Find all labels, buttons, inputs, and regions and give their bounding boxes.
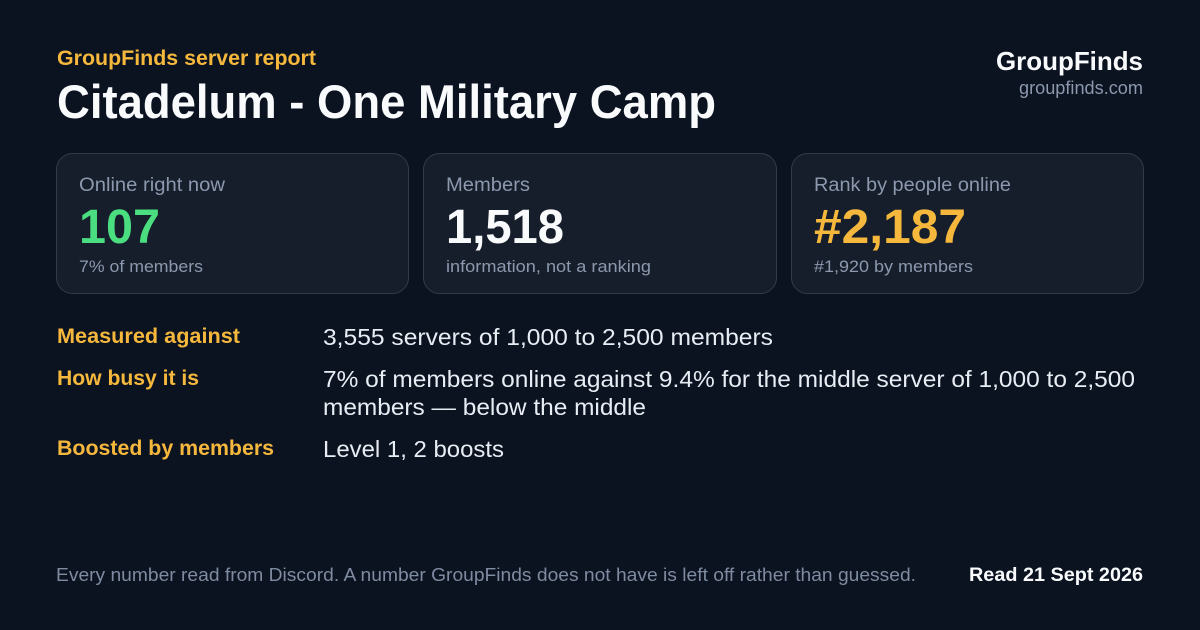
label: Rank by people online — [814, 175, 1011, 196]
row: boosted by members — [57, 436, 504, 462]
panel: online right now — [56, 154, 408, 294]
label: Online right now — [79, 175, 225, 196]
value: 107 — [79, 201, 160, 254]
panel: rank by people online — [792, 154, 1144, 294]
footer note: Every number read from Discord. A number GroupFinds does not have is left off rather than guessed. — [56, 565, 916, 585]
read date: Read 21 Sept 2026 — [969, 565, 1143, 586]
note: 7% of members — [79, 257, 203, 276]
row value: members — below the middle — [323, 394, 646, 420]
row value: 3,555 servers of 1,000 to 2,500 members — [323, 324, 773, 350]
row label: Measured against — [57, 325, 240, 348]
note: information, not a ranking — [446, 257, 651, 276]
panel: members — [424, 154, 776, 294]
value: #2,187 — [814, 201, 966, 254]
row value — [323, 366, 1135, 420]
brand block — [996, 46, 1143, 98]
row: measured against — [57, 324, 773, 350]
row label: Boosted by members — [57, 437, 274, 460]
note: #1,920 by members — [814, 257, 973, 276]
title: Citadelum - One Military Camp — [57, 75, 716, 128]
brand name: GroupFinds — [996, 46, 1143, 76]
eyebrow: GroupFinds server report — [57, 47, 316, 70]
label: Members — [446, 175, 530, 196]
row: how busy it is — [57, 366, 1135, 420]
row label: How busy it is — [57, 367, 199, 390]
row value: Level 1, 2 boosts — [323, 436, 504, 462]
value: 1,518 — [446, 201, 564, 254]
row value: 7% of members online against 9.4% for the middle server of 1,000 to 2,500 — [323, 366, 1135, 392]
brand url: groupfinds.com — [1019, 78, 1143, 98]
